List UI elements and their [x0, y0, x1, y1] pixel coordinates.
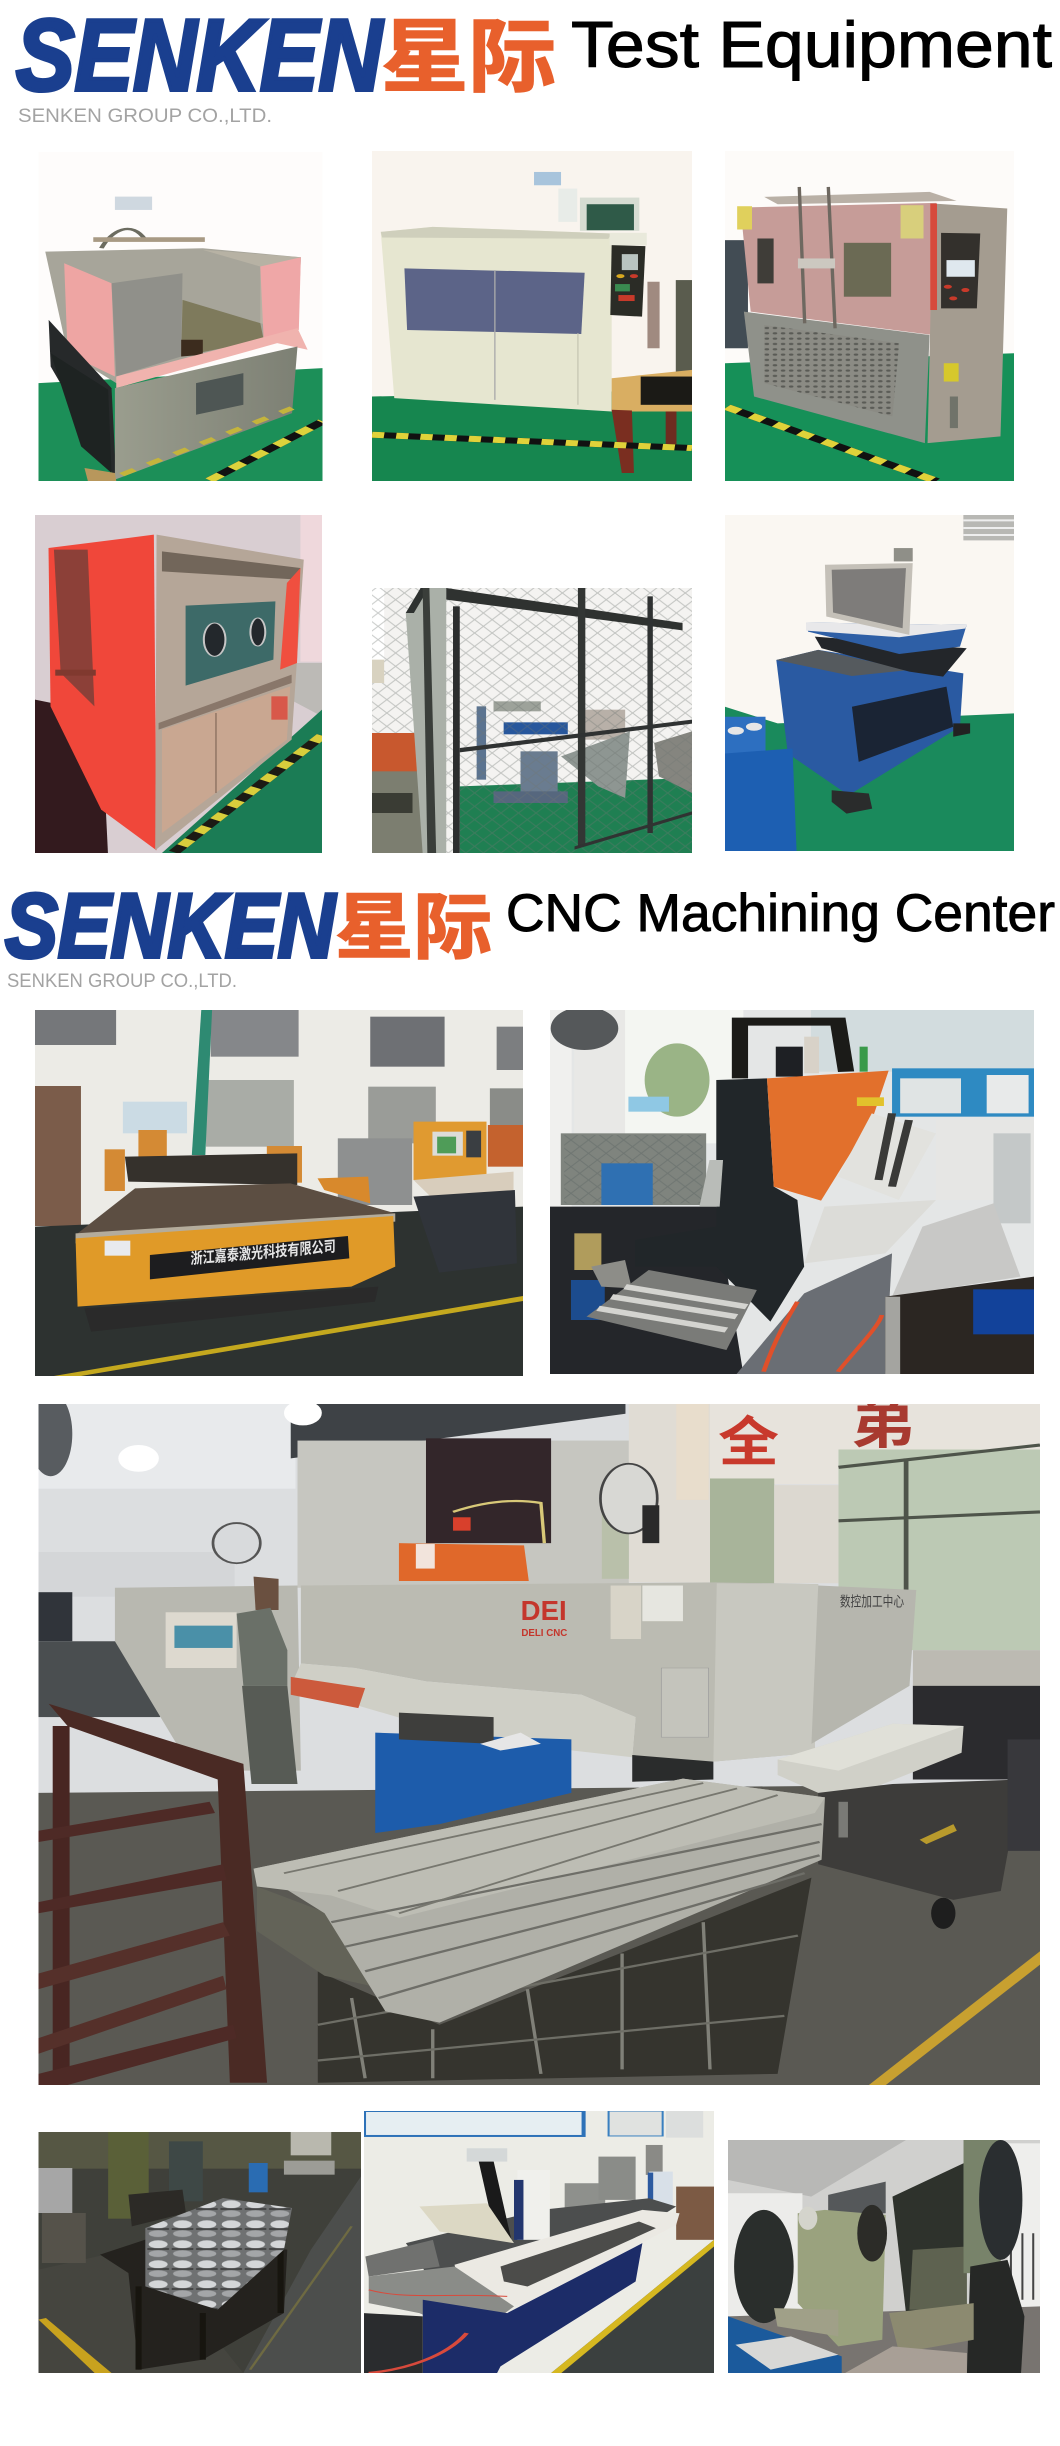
photo: blue vibration test rig: [725, 515, 1014, 851]
logo wordmark: chinese brand: 星际: [381, 13, 556, 102]
red wall character: 全: [718, 1412, 779, 1472]
photo: deli cnc machining line with aluminium blanks: [38, 1395, 1040, 2085]
heading: cnc machining center: CNC Machining Center: [506, 884, 1055, 943]
logo wordmark: chinese brand: 星际: [335, 888, 492, 968]
machine brand text: DEI: [521, 1595, 567, 1626]
logo wordmark: SENKEN: SENKEN: [16, 0, 384, 112]
photo: deli cnc machining line with aluminium blanks: 数控加工中心: [840, 1593, 904, 1610]
photo: stacked machined aluminium cylinders: [38, 2132, 361, 2373]
photo: climate test chamber: [725, 186, 1014, 481]
photo: orange laser cutter: [35, 1010, 523, 1376]
header: cnc machining center logo and title: [5, 876, 1055, 992]
photo: orange cnc machine: [550, 1010, 1034, 1374]
red wall character: 弟: [851, 1395, 915, 1454]
photo: fenced test cage: [372, 588, 692, 853]
company name: SENKEN GROUP CO.,LTD.: [7, 971, 237, 992]
machine brand caption: DELI CNC: [521, 1627, 567, 1638]
photo: beige ageing chamber: [372, 151, 692, 481]
photo: punch presses: [728, 2140, 1040, 2373]
photo: red lit test cabinet: [35, 515, 322, 853]
company name: SENKEN GROUP CO.,LTD.: [18, 105, 272, 127]
heading: test equipment: Test Equipment: [571, 8, 1052, 81]
header: test equipment logo and title: [16, 0, 1052, 127]
photo: cnc milling bench with tool tray: [364, 2111, 714, 2373]
photo: water tank test equipment: [38, 196, 322, 481]
logo wordmark: SENKEN: SENKEN: [5, 876, 337, 977]
